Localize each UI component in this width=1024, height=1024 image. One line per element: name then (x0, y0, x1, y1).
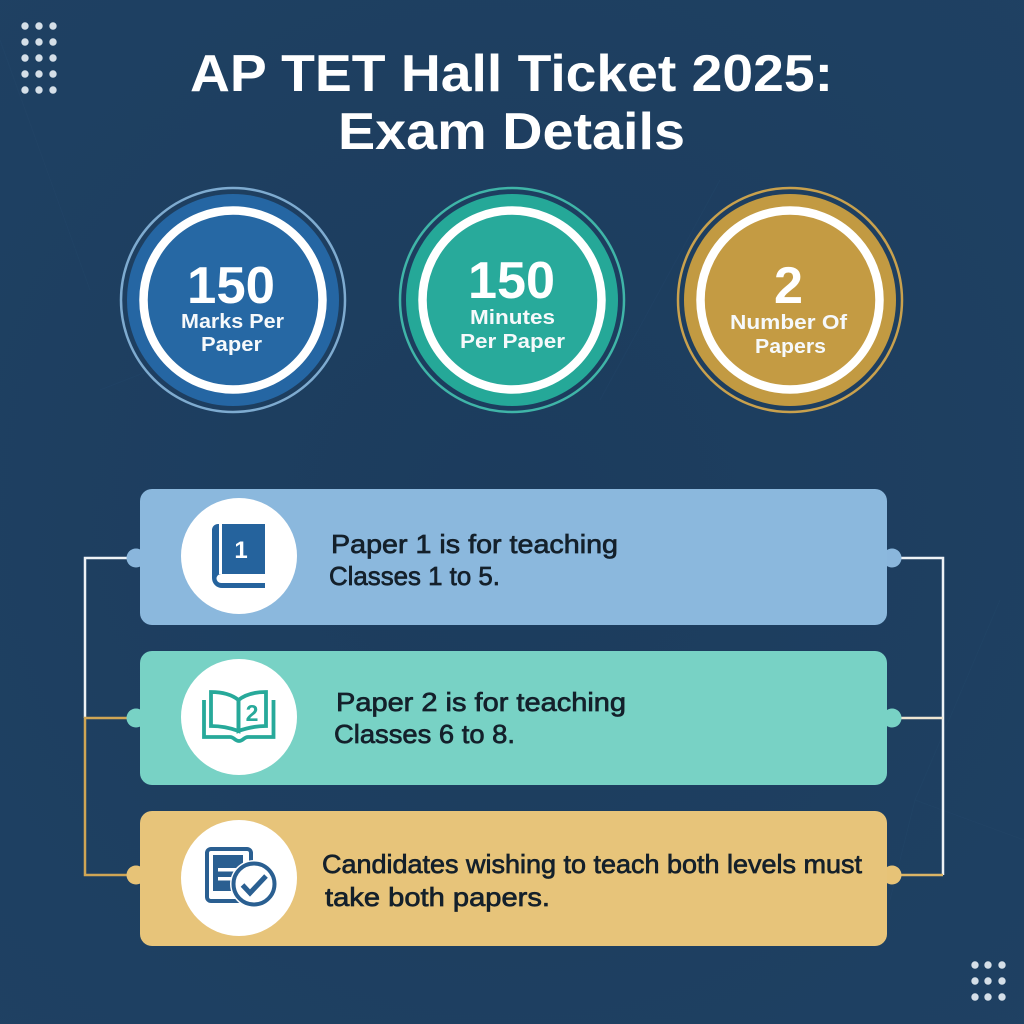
icon: open book 2: 2 (246, 700, 258, 726)
text: paper 1: Paper 1 is for teaching (331, 529, 618, 559)
stat circle: 150 marks per paper (121, 188, 345, 412)
text: paper 2: Classes 6 to 8. (334, 719, 515, 749)
title: AP TET Hall Ticket 2025: (190, 45, 833, 103)
decorative dots: top left (21, 22, 57, 94)
stat circle: 2 number of papers (678, 188, 902, 412)
text: paper 2 (334, 687, 626, 749)
stat circle: 150 marks per paper: Marks Per (181, 311, 284, 333)
icon: document with check (207, 849, 278, 908)
title: Exam Details (338, 103, 685, 161)
connector: left bracket (85, 558, 130, 875)
decorative dots: bottom right (971, 961, 1006, 1001)
stat circle: 2 number of papers: Papers (755, 336, 826, 358)
title (190, 45, 833, 161)
stat circle: 150 marks per paper: Paper (201, 334, 262, 356)
icon: closed book 1: 1 (234, 537, 248, 564)
text: paper 1: Classes 1 to 5. (329, 561, 500, 591)
stat circle: 150 minutes per paper (400, 188, 624, 412)
panel: both papers (126, 811, 902, 946)
text: both papers: take both papers. (325, 882, 550, 912)
stat circle: 2 number of papers: Number Of (730, 312, 847, 334)
text: both papers (322, 849, 863, 912)
icon: open book 2 (204, 692, 274, 741)
stat circle: 2 number of papers: 2 (774, 257, 803, 315)
stat circle: 150 minutes per paper: 150 (468, 252, 555, 310)
connector: right bracket (895, 558, 943, 875)
icon: closed book 1 (212, 524, 265, 588)
panel: paper 2 (126, 651, 902, 785)
panel: paper 1 (126, 489, 902, 625)
stat circle: 150 marks per paper: 150 (187, 257, 275, 315)
text: paper 1 (329, 529, 618, 591)
text: paper 2: Paper 2 is for teaching (336, 687, 626, 717)
text: both papers: Candidates wishing to teach both levels must (322, 849, 863, 879)
stat circle: 150 minutes per paper: Minutes (470, 307, 555, 329)
stat circle: 150 minutes per paper: Per Paper (460, 331, 565, 353)
